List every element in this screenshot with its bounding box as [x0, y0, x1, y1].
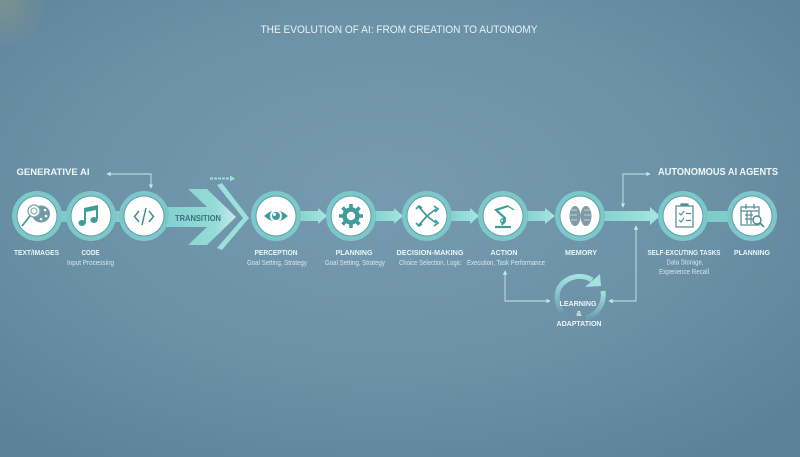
node: planning calendar	[727, 191, 777, 241]
connector bar: tasks to planning	[700, 211, 735, 222]
arrow: transition small dashes	[210, 176, 235, 182]
arrow: transition chevron	[165, 183, 249, 250]
arrow: planning to decision-making	[374, 208, 403, 224]
labels: perception: PERCEPTION	[254, 248, 298, 257]
node: planning	[326, 191, 376, 241]
node: self-executing tasks	[658, 191, 708, 241]
icon: robot arm	[495, 206, 514, 227]
labels: planning: Goal Setting, Strategy	[325, 260, 385, 267]
connector arrow: action to learning	[505, 271, 550, 301]
loop: learning and adaptation	[556, 274, 603, 328]
node: perception	[251, 191, 301, 241]
labels: self-executing tasks: Experience Recall	[659, 269, 709, 276]
icon: brain	[570, 206, 592, 226]
arrow: memory to self-executing tasks	[602, 207, 660, 225]
node: code	[66, 191, 116, 241]
connector arrow: learning to memory bar	[609, 226, 636, 301]
icon: clipboard checklist	[676, 204, 693, 227]
labels: code	[67, 248, 114, 267]
labels: perception	[247, 248, 307, 267]
labels: decision-making: Choice Selection, Logic	[399, 260, 461, 267]
loop: learning and adaptation: ADAPTATION	[556, 319, 602, 328]
icon: gear	[339, 204, 363, 228]
loop: learning and adaptation: LEARNING	[560, 299, 597, 308]
arrow: decision-making to action	[450, 208, 479, 224]
node: input processing	[119, 191, 169, 241]
icon: crossing arrows	[416, 206, 438, 226]
loop: learning and adaptation: &	[576, 309, 582, 318]
labels: text/images: TEXT/IMAGES	[14, 248, 59, 257]
labels: planning right: PLANNING	[734, 248, 770, 257]
labels: action	[467, 248, 545, 267]
labels: self-executing tasks: SELF-EXCUTING TASKS	[648, 248, 720, 257]
labels: perception: Goal Setting, Strategy	[247, 260, 307, 267]
node: text/images	[12, 191, 62, 241]
icon: palette with swirl	[22, 205, 50, 226]
icon: calendar with magnifier	[741, 204, 764, 227]
icon: code brackets	[134, 208, 154, 225]
arrow: action to memory	[526, 208, 555, 224]
heading: autonomous AI agents: AUTONOMOUS AI AGENTS	[658, 167, 778, 178]
arrow: transition chevron: TRANSITION	[175, 214, 221, 223]
icon: music note	[78, 205, 98, 226]
node: memory	[555, 191, 605, 241]
labels: self-executing tasks	[648, 248, 720, 276]
labels: self-executing tasks: Data Storage,	[666, 260, 704, 266]
labels: code: CODE	[82, 248, 100, 257]
labels: decision-making	[396, 248, 464, 267]
node: decision-making	[402, 191, 452, 241]
labels: action: Execution, Task Performance	[467, 260, 545, 267]
connector bars between generative circles	[58, 211, 128, 222]
labels: memory: MEMORY	[565, 248, 597, 257]
node: action	[478, 191, 528, 241]
labels: planning	[325, 248, 385, 267]
arrow: perception to planning	[298, 208, 327, 224]
connector arrow: to autonomous heading	[623, 174, 650, 207]
heading: generative AI: GENERATIVE AI	[16, 167, 90, 178]
labels: planning: PLANNING	[336, 248, 373, 257]
title: THE EVOLUTION OF AI: FROM CREATION TO AUTONOMY	[260, 24, 538, 36]
icon: eye	[264, 210, 288, 222]
connector arrow: generative AI to code	[107, 174, 151, 188]
labels: action: ACTION	[490, 248, 518, 257]
labels: decision-making: DECISION-MAKING	[396, 248, 464, 257]
labels: code: Input Processing	[67, 260, 114, 267]
